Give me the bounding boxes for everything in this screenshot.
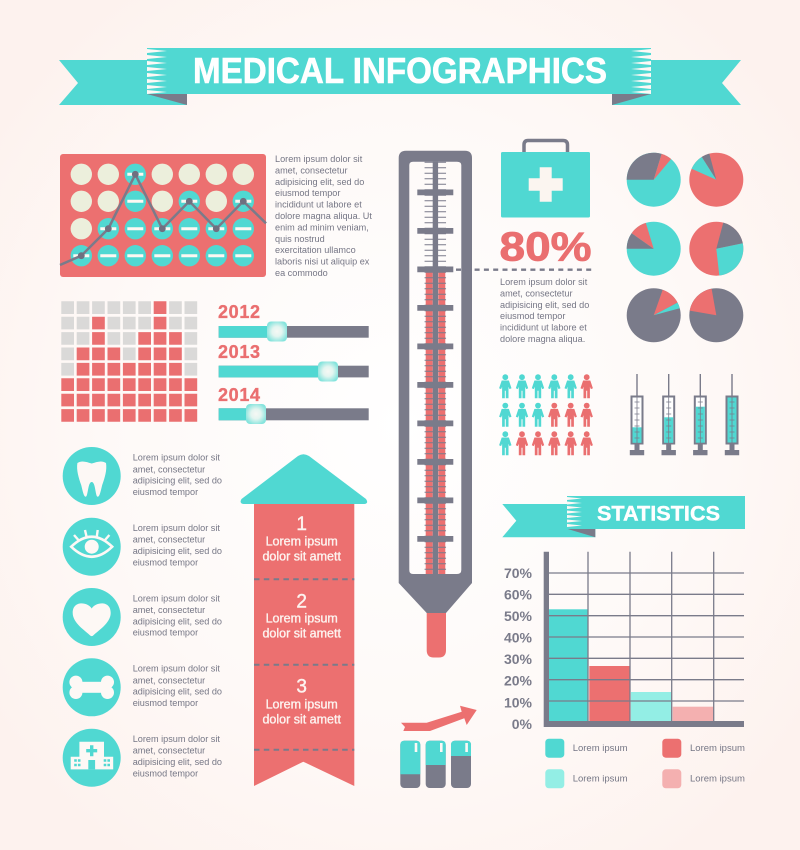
text block: tooth: Lorem ipsum dolor sit: [133, 453, 220, 463]
text block: top left paragraph: eiusmod tempor: [275, 188, 340, 198]
text block: 80% description: incididunt ut labore et: [500, 323, 587, 333]
text block: 80% description: [500, 277, 589, 344]
mini bars: [400, 741, 471, 788]
text block: top left paragraph: ea commodo: [275, 268, 328, 278]
icon: bone: [63, 658, 121, 716]
text block: tooth: amet, consectetur: [133, 464, 205, 474]
text block: top left paragraph: incididunt ut labore et: [275, 200, 362, 210]
title banner: [59, 48, 741, 105]
step 3: [262, 677, 341, 726]
statistics banner: [502, 496, 745, 537]
pie chart 5: [627, 288, 681, 342]
step 2: Lorem ipsum: [266, 612, 338, 626]
text block: eye: [133, 523, 222, 567]
text block: 80% description: adipisicing elit, sed do: [500, 300, 589, 310]
step 1: dolor sit amett: [262, 550, 341, 564]
slider: 2014: 2014: [218, 385, 260, 405]
text block: heart: Lorem ipsum dolor sit: [133, 593, 220, 603]
square grid chart: [61, 301, 197, 422]
dashed pointer line: [456, 269, 594, 271]
y axis labels: 0%: [512, 716, 533, 732]
y axis labels: 10%: [504, 694, 533, 710]
text block: eye: eiusmod tempor: [133, 557, 198, 567]
text block: 80% description: Lorem ipsum dolor sit: [500, 277, 588, 287]
icon: syringe 3: [693, 374, 708, 455]
slider: 2012: [218, 302, 369, 342]
step 3: dolor sit amett: [262, 712, 341, 726]
step 2: dolor sit amett: [262, 627, 341, 641]
pie chart 3: [627, 222, 681, 276]
slider: 2014: [218, 385, 369, 424]
text block: tooth: [133, 453, 222, 497]
step 2: 2: [296, 591, 307, 612]
people pictogram: [499, 374, 593, 455]
pie chart 1: [627, 153, 681, 207]
text block: bone: Lorem ipsum dolor sit: [133, 664, 220, 674]
text block: hospital: amet, consectetur: [133, 746, 205, 756]
pie chart 4: [689, 222, 743, 276]
thermometer bulb: [427, 610, 446, 658]
icon: eye: [63, 518, 121, 576]
big number 80%: 80%: [500, 224, 592, 270]
text block: eye: adipisicing elit, sed do: [133, 546, 222, 556]
icon: heart: [63, 588, 121, 646]
y axis labels: 20%: [504, 672, 533, 688]
text block: hospital: adipisicing elit, sed do: [133, 757, 222, 767]
pie chart 6: [689, 288, 743, 342]
text block: heart: amet, consectetur: [133, 605, 205, 615]
step 2: [262, 591, 341, 641]
text block: heart: adipisicing elit, sed do: [133, 616, 222, 626]
text block: hospital: [133, 734, 222, 778]
text block: eye: amet, consectetur: [133, 535, 205, 545]
icon: syringe 2: [662, 374, 676, 455]
text block: hospital: eiusmod tempor: [133, 768, 198, 778]
thermometer: [399, 151, 472, 657]
text block: bone: [133, 664, 222, 708]
arrow head: [241, 454, 367, 504]
step 1: Lorem ipsum: [266, 535, 338, 549]
text block: hospital: Lorem ipsum dolor sit: [133, 734, 220, 744]
text block: 80% description: dolore magna aliqua.: [500, 334, 585, 344]
text block: heart: eiusmod tempor: [133, 628, 198, 638]
arrow ribbon with steps: [241, 454, 367, 786]
text block: tooth: adipisicing elit, sed do: [133, 476, 222, 486]
text block: bone: eiusmod tempor: [133, 698, 198, 708]
slider: 2012: 2012: [218, 302, 260, 322]
text block: bone: amet, consectetur: [133, 675, 205, 685]
text block: bone: adipisicing elit, sed do: [133, 687, 222, 697]
title: MEDICAL INFOGRAPHICS: [193, 50, 607, 91]
pie chart 2: [689, 153, 743, 207]
growth arrow: [401, 706, 477, 731]
y axis labels: 50%: [504, 608, 533, 624]
step 3: Lorem ipsum: [266, 697, 338, 711]
y axis labels: 40%: [504, 630, 533, 646]
chart legend: Lorem ipsum: [573, 743, 628, 754]
line chart: [60, 171, 266, 265]
text block: top left paragraph: adipisicing elit, sed do: [275, 177, 364, 187]
text block: top left paragraph: exercitation ullamco: [275, 245, 356, 255]
chart legend: Lorem ipsum: [690, 773, 745, 784]
y axis labels: 70%: [504, 565, 533, 581]
slider: 2013: 2013: [218, 342, 260, 362]
icon: medical case: [501, 140, 590, 218]
text block: top left paragraph: dolore magna aliqua. Ut: [275, 211, 372, 221]
text block: 80% description: amet, consectetur: [500, 288, 573, 298]
icon: syringe 1: [630, 374, 644, 455]
text block: top left paragraph: quis nostrud: [275, 234, 325, 244]
icon: tooth: [63, 447, 121, 505]
text block: tooth: eiusmod tempor: [133, 487, 198, 497]
chart legend: Lorem ipsum: [573, 773, 628, 784]
bar chart: [504, 552, 744, 732]
chart legend: [545, 739, 745, 788]
y axis labels: 30%: [504, 651, 533, 667]
icon: syringe 4: [725, 374, 739, 455]
text block: 80% description: eiusmod tempor: [500, 311, 565, 321]
step 3: 3: [296, 677, 307, 698]
text block: top left paragraph: Lorem ipsum dolor sit: [275, 154, 363, 164]
text block: top left paragraph: laboris nisi ut aliquip ex: [275, 257, 370, 267]
panel: pill line chart: [60, 154, 266, 277]
statistics heading: STATISTICS: [597, 502, 720, 526]
slider: 2013: [218, 342, 369, 382]
text block: top left paragraph: enim ad minim veniam,: [275, 222, 369, 232]
step 1: [262, 514, 341, 564]
text block: top left paragraph: [275, 154, 372, 278]
y axis labels: 60%: [504, 587, 533, 603]
text block: heart: [133, 593, 222, 638]
y axis labels: [504, 565, 533, 732]
step 1: 1: [296, 514, 307, 535]
icon: hospital: [63, 729, 121, 787]
text block: eye: Lorem ipsum dolor sit: [133, 523, 220, 533]
text block: top left paragraph: amet, consectetur: [275, 165, 348, 175]
chart legend: Lorem ipsum: [690, 743, 745, 754]
